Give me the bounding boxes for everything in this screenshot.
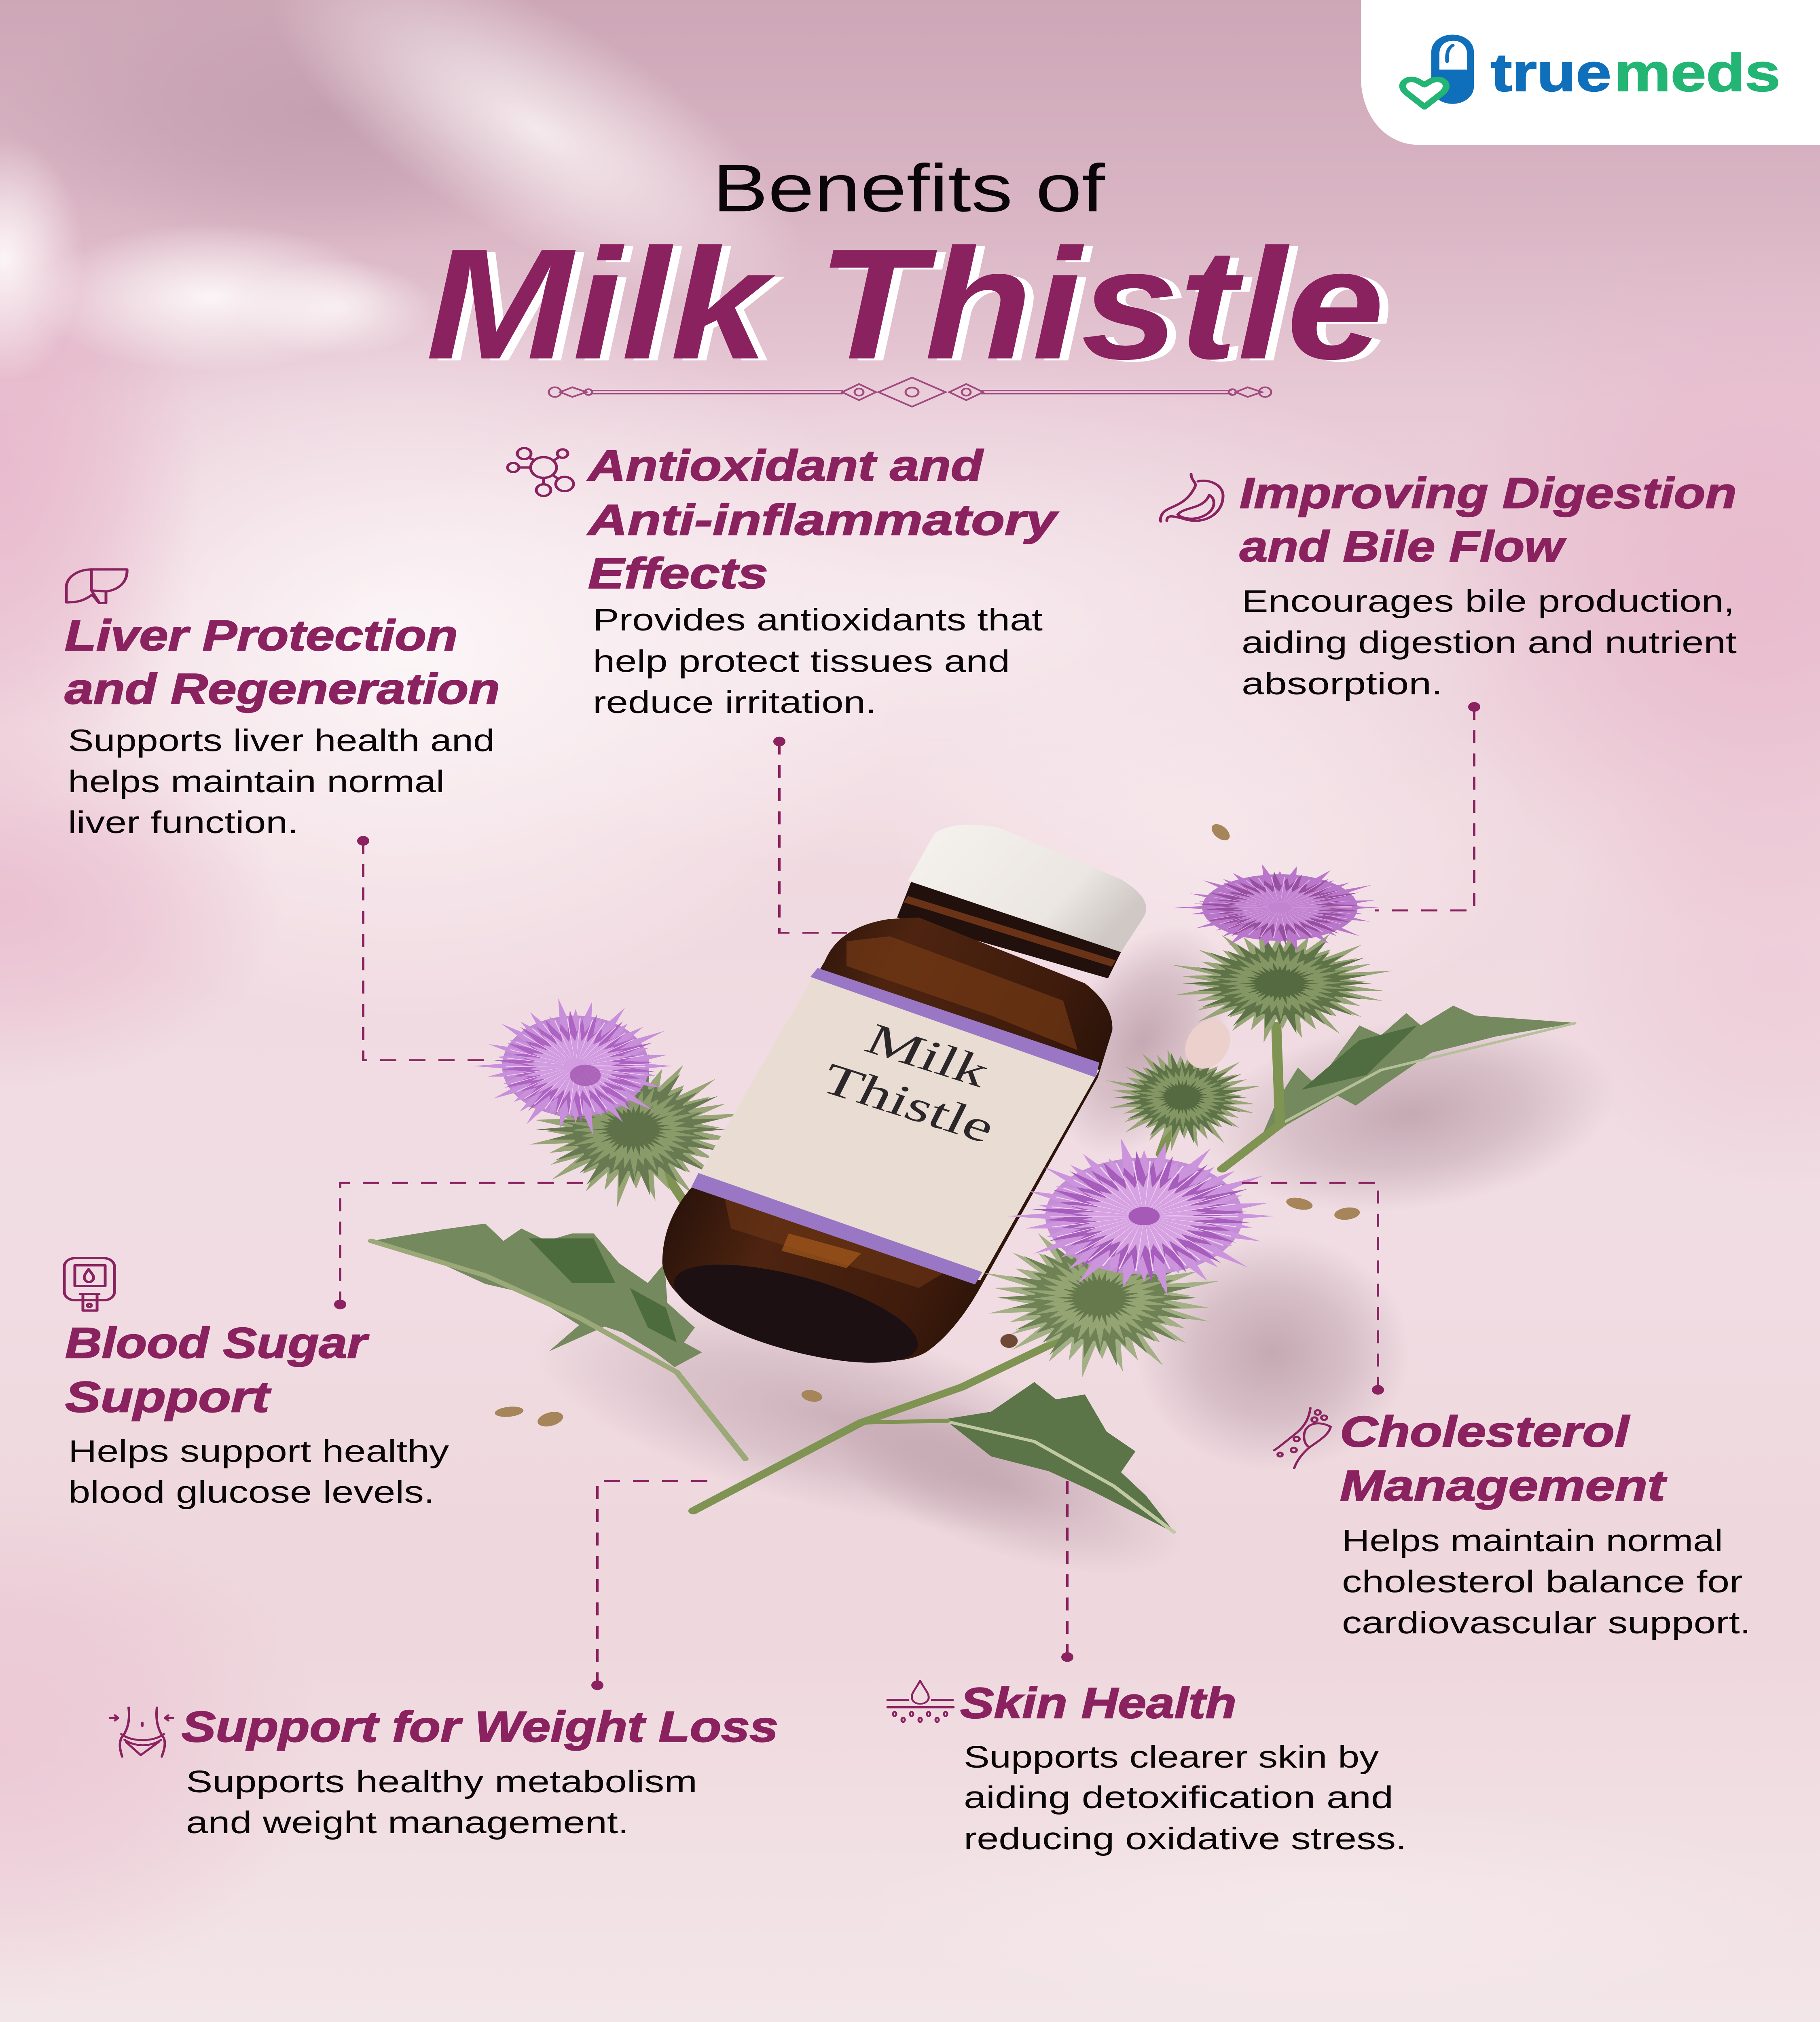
body text: reduce irritation. (593, 685, 876, 720)
flower: head left (473, 998, 673, 1135)
logo wordmark (1491, 43, 1780, 102)
body text (186, 1764, 697, 1840)
body text: cholesterol balance for (1342, 1565, 1743, 1599)
body text: liver function. (68, 805, 298, 840)
flower: bulb left (489, 1033, 770, 1226)
heading: Anti-inflammatory (587, 495, 1059, 544)
heading: Antioxidant and (587, 441, 984, 490)
logo icon: capsule and heart (1403, 35, 1474, 107)
flower: bulb top right (1136, 909, 1417, 1057)
body text (1242, 584, 1737, 701)
bottle neck (897, 881, 1121, 978)
body text: Helps support healthy (68, 1434, 449, 1469)
flower: bud (1081, 1017, 1278, 1165)
icon: skin droplet (888, 1681, 953, 1722)
flower: head top right (1174, 864, 1380, 952)
cap (908, 825, 1146, 952)
panel: weight loss (110, 1702, 778, 1840)
body text: helps maintain normal (68, 764, 444, 799)
heading: and Bile Flow (1240, 522, 1566, 571)
heading: Support (65, 1373, 271, 1421)
heading: Liver Protection (65, 611, 458, 660)
heading (1340, 1407, 1667, 1510)
seeds (494, 822, 1362, 1430)
icon: liver (66, 569, 127, 603)
body text (68, 723, 495, 840)
body text: Provides antioxidants that (593, 603, 1043, 637)
body text: Helps maintain normal (1342, 1523, 1723, 1558)
icon: waist (110, 1707, 173, 1757)
heading: Management (1340, 1461, 1667, 1510)
ornamental divider (549, 378, 1271, 407)
body text: Supports clearer skin by (964, 1740, 1379, 1775)
bottle (655, 825, 1146, 1383)
soft shadows (489, 912, 1648, 1611)
photo: thistles and bottle (371, 822, 1648, 1611)
heading: and Regeneration (65, 664, 500, 713)
heading: Cholesterol (1340, 1407, 1630, 1456)
flower: head front (1006, 1138, 1274, 1296)
body text: absorption. (1242, 666, 1443, 701)
connector: blood sugar (334, 1183, 595, 1309)
title: Milk Thistle: Milk Thistle (426, 216, 1384, 392)
body text: Supports healthy metabolism (186, 1764, 697, 1799)
connector: digestion (1375, 702, 1480, 910)
leaf: bottom (944, 1382, 1175, 1533)
panel: digestion (1160, 469, 1737, 701)
panel: antioxidant (508, 441, 1059, 720)
panel: skin health (888, 1679, 1407, 1856)
logo wordmark: true (1491, 43, 1611, 102)
label stripes (811, 968, 1099, 1077)
body text: and weight management. (186, 1805, 629, 1840)
heading: Blood Sugar (65, 1318, 369, 1367)
title: Benefits of: Benefits of (713, 150, 1105, 226)
heading: Improving Digestion (1240, 469, 1737, 517)
label (695, 975, 1099, 1280)
connector: skin (1061, 1481, 1073, 1662)
leaf: left (371, 1224, 745, 1459)
leaf: upper right (1222, 1006, 1576, 1172)
body text: reducing oxidative stress. (964, 1821, 1407, 1856)
body text (964, 1740, 1407, 1856)
body text (593, 603, 1043, 720)
bottle label text (813, 1014, 1003, 1152)
stems (662, 1026, 1280, 1511)
body text: Encourages bile production, (1242, 584, 1735, 619)
icon: molecule (508, 448, 574, 496)
body text: Supports liver health and (68, 723, 495, 758)
connector: antioxidant (773, 737, 847, 933)
panel: liver protection (65, 569, 500, 840)
icon: artery (1274, 1408, 1331, 1468)
title: Milk Thistle: Milk Thistle (435, 218, 1393, 394)
connector: weight loss (591, 1481, 716, 1690)
heading: Skin Health (960, 1679, 1236, 1727)
icon: glucose meter (64, 1258, 114, 1311)
flower: bulb front (946, 1198, 1246, 1398)
panel: blood sugar (64, 1258, 449, 1510)
panel: cholesterol (1274, 1407, 1751, 1640)
bottle body (662, 918, 1112, 1360)
heading: Effects (588, 549, 768, 597)
bottle label text: Thistle (813, 1054, 1003, 1152)
bottle base (655, 1244, 937, 1383)
logo panel (1361, 0, 1820, 145)
heading (587, 441, 1059, 597)
body text: aiding detoxification and (964, 1780, 1393, 1815)
connector: liver (357, 836, 491, 1060)
logo wordmark: meds (1614, 43, 1780, 102)
heading (65, 611, 500, 713)
body text: help protect tissues and (593, 644, 1010, 679)
icon: stomach (1160, 474, 1223, 522)
connector: cholesterol (1238, 1183, 1384, 1395)
heading: Support for Weight Loss (182, 1702, 778, 1751)
body text: cardiovascular support. (1342, 1605, 1751, 1640)
heading (1240, 469, 1737, 571)
body text (1342, 1523, 1751, 1640)
body text (68, 1434, 449, 1510)
bottle label text: Milk (858, 1014, 998, 1096)
heading (65, 1318, 369, 1421)
body text: blood glucose levels. (68, 1475, 435, 1510)
body text: aiding digestion and nutrient (1242, 625, 1737, 660)
